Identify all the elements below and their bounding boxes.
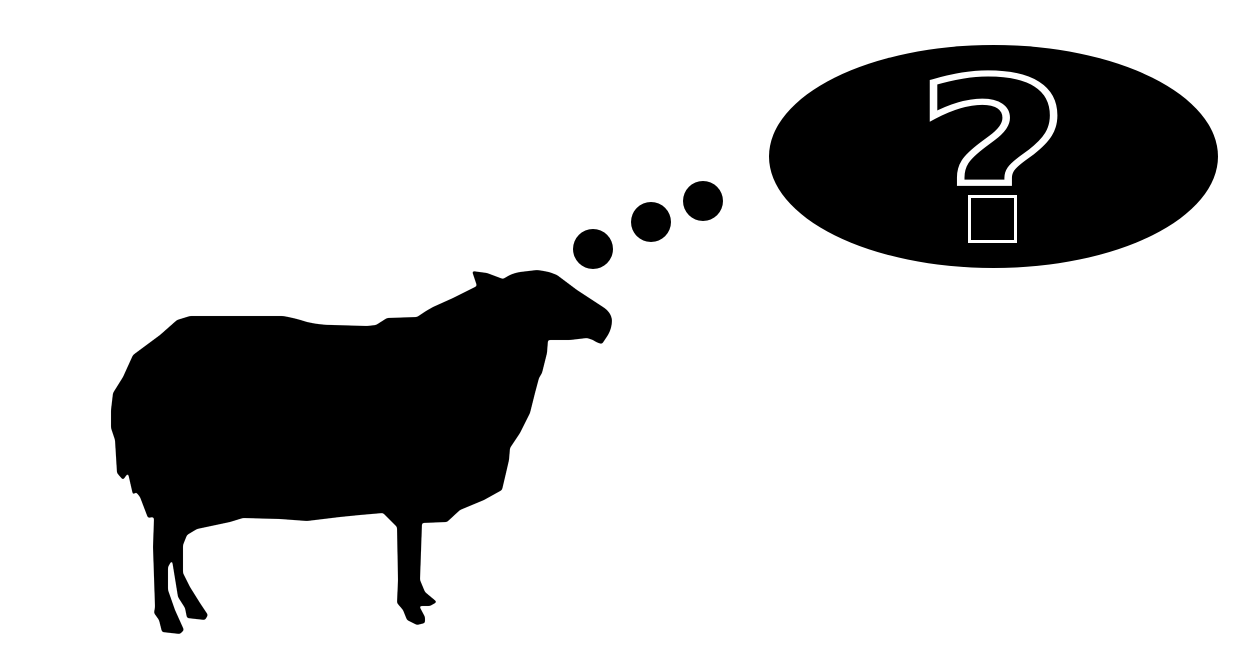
icon: sheep silhouette: [111, 270, 612, 634]
thought bubble ellipse: [769, 45, 1218, 268]
question mark: ?: [915, 34, 1071, 290]
thought bubble dot: small: [573, 229, 613, 269]
thought bubble dot: large: [683, 181, 723, 221]
thought bubble dot: medium: [631, 202, 671, 242]
